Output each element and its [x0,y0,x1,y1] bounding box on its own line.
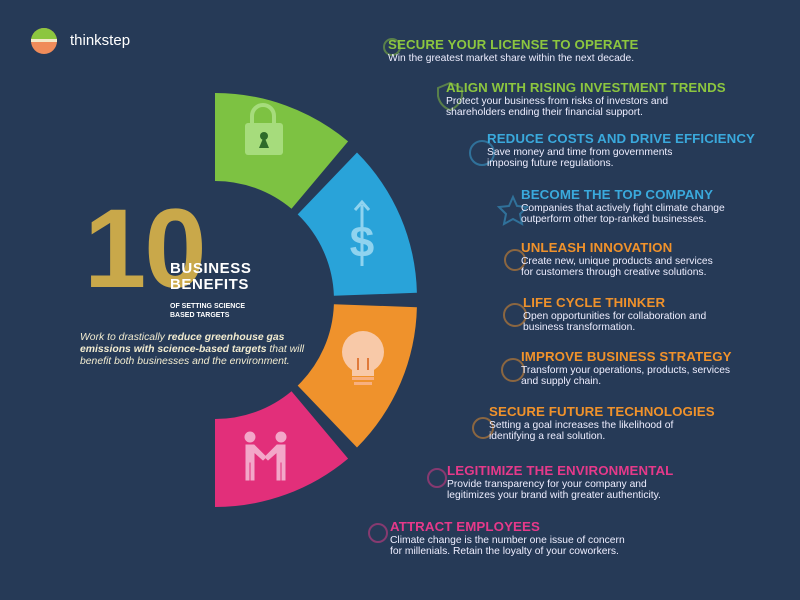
item 7: and supply chain. [521,376,601,387]
item 6 [523,295,706,333]
item 10 [390,519,625,557]
item 5: UNLEASH INNOVATION [521,240,672,255]
heading: business benefits [170,260,252,319]
item 3: Save money and time from governments [487,147,672,158]
item 8 [489,404,715,442]
logo [31,28,130,54]
item 7 [521,349,732,387]
item 4: BECOME THE TOP COMPANY [521,187,713,202]
segment: orange bulb [298,304,417,448]
item 10: Climate change is the number one issue of concern [390,535,625,546]
item 1: Win the greatest market share within the next decade. [388,53,634,64]
item 7: Transform your operations, products, services [521,365,730,376]
item 10: ATTRACT EMPLOYEES [390,519,540,534]
item 2: shareholders ending their financial support. [446,107,643,118]
item 5: for customers through creative solutions. [521,267,706,278]
item 8: SECURE FUTURE TECHNOLOGIES [489,404,715,419]
item 6: business transformation. [523,322,635,333]
item 4: outperform other top-ranked businesses. [521,214,706,225]
item 6: Open opportunities for collaboration and [523,311,706,322]
item 2 [446,80,726,118]
heading: business benefits: BUSINESS [170,260,252,277]
item 6: LIFE CYCLE THINKER [523,295,665,310]
logo: thinkstep [70,32,130,49]
item 10: for millenials. Retain the loyalty of your coworkers. [390,546,619,557]
item 4 [521,187,725,225]
item 4: Companies that actively fight climate change [521,203,725,214]
segment: blue dollar: $ [350,218,374,267]
item 1 [388,37,639,64]
segment: blue dollar [298,152,417,296]
faint list icons [369,39,527,542]
item 8: identifying a real solution. [489,431,605,442]
item 9: Provide transparency for your company and [447,479,647,490]
big number 10: 10 [84,186,205,311]
item 3: imposing future regulations. [487,158,614,169]
item 8: Setting a goal increases the likelihood of [489,420,673,431]
item 3: REDUCE COSTS AND DRIVE EFFICIENCY [487,131,755,146]
item 3 [487,131,755,169]
item 2: Protect your business from risks of investors and [446,96,668,107]
item 9: legitimizes your brand with greater authenticity. [447,490,661,501]
item 9 [447,463,673,501]
segment: pink people [215,391,348,507]
item 5 [521,240,713,278]
heading: business benefits: OF SETTING SCIENCE [170,303,245,310]
segment: green lock [215,93,348,209]
item 2: ALIGN WITH RISING INVESTMENT TRENDS [446,80,726,95]
intro paragraph: Work to drastically reduce greenhouse gas emissions with science-based targets that will benefit both businesses and the environment. [80,332,304,367]
item 5: Create new, unique products and services [521,256,713,267]
heading: business benefits: BENEFITS [170,276,249,293]
item 1: SECURE YOUR LICENSE TO OPERATE [388,37,639,52]
item 7: IMPROVE BUSINESS STRATEGY [521,349,732,364]
heading: business benefits: BASED TARGETS [170,312,229,319]
item 9: LEGITIMIZE THE ENVIRONMENTAL [447,463,673,478]
